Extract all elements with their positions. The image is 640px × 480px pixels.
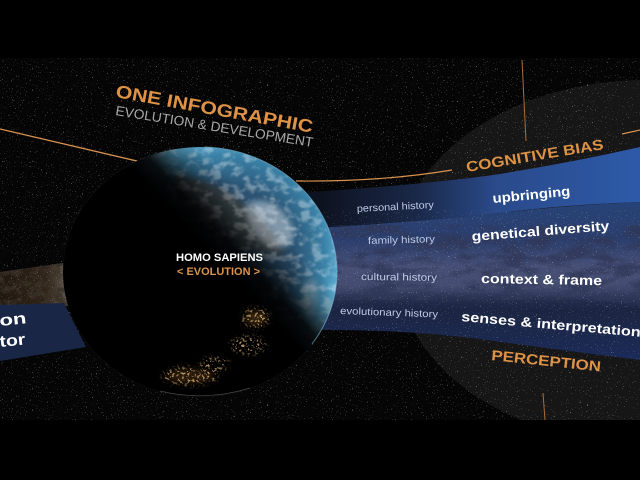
panel: right perception bands: [306, 147, 640, 360]
band: genetical diversity and context: [328, 202, 640, 308]
evolutionary history: evolutionary history: [340, 306, 438, 320]
panel: left label band: [0, 303, 86, 361]
upbringing: upbringing: [492, 184, 571, 206]
personal history: personal history: [357, 200, 434, 215]
bright cloud mass: [245, 200, 293, 248]
factor labels: [461, 184, 640, 340]
land: [175, 175, 285, 255]
lit ocean: [63, 147, 337, 397]
context and frame: context & frame: [481, 271, 603, 288]
night side rim: [160, 388, 250, 396]
translucent perception circle: [415, 80, 640, 420]
title: [114, 81, 315, 150]
earth globe: [60, 145, 340, 400]
atmosphere rim: [205, 147, 337, 344]
cultural history: cultural history: [361, 272, 437, 284]
band: senses and interpretation: [322, 310, 640, 360]
homo sapiens label: HOMO SAPIENS: [176, 252, 263, 264]
cognitive bias heading: COGNITIVE BIAS: [465, 137, 605, 176]
orange orbit lines: [0, 60, 640, 420]
band: upbringing: [306, 147, 640, 227]
city lights: [158, 304, 274, 390]
globe label: [176, 252, 263, 278]
perception heading: PERCEPTION: [491, 348, 602, 375]
milky way texture: [330, 225, 640, 300]
history labels: [340, 200, 438, 320]
panel: left milky way strip: [0, 263, 68, 306]
cloud texture: [124, 147, 337, 330]
senses and interpretation: senses & interpretation: [461, 309, 640, 340]
title line 1: ONE INFOGRAPHIC: [114, 81, 315, 137]
evolution label: < EVOLUTION >: [177, 266, 260, 278]
band star texture: [323, 210, 640, 360]
space background: [0, 58, 640, 420]
infographic scene: [0, 58, 640, 420]
title line 2: EVOLUTION & DEVELOPMENT: [115, 103, 314, 150]
night shadow: [60, 145, 340, 400]
genetical diversity: genetical diversity: [471, 218, 610, 244]
family history: family history: [368, 234, 435, 247]
